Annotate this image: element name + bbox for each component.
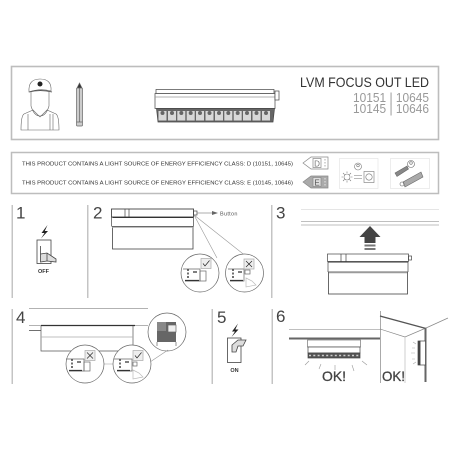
energy label E: [303, 176, 328, 188]
off label: OFF: [38, 269, 50, 275]
icon: switch off: [37, 240, 56, 264]
button label and arrow: Button: [220, 212, 238, 218]
step number 2: 2: [93, 204, 102, 222]
ok label right: OK!: [382, 368, 405, 384]
energy label E: E: [314, 178, 320, 188]
step 5: [212, 308, 246, 384]
luminaire: [308, 340, 360, 358]
step 6: [272, 307, 448, 384]
step 3: [271, 204, 439, 298]
wall rays: [411, 342, 416, 364]
track and luminaire: [29, 308, 148, 351]
icon: switch on: [228, 338, 246, 362]
light rays: [305, 361, 367, 371]
detail circle: wrong: [66, 345, 104, 383]
step 1: [12, 204, 56, 298]
product code line 2: 10145 | 10646: [353, 102, 429, 116]
icon: bolt: [41, 225, 48, 238]
luminaire illustration: [155, 90, 279, 122]
icon: driver replaceable: [390, 158, 430, 188]
luminaire: [328, 254, 412, 294]
step number 4: 4: [16, 308, 25, 327]
step number 5: 5: [217, 308, 226, 327]
luminaire top view: [112, 209, 197, 249]
step number 6: 6: [276, 307, 285, 326]
detail circle: correct: [181, 254, 219, 292]
step 2: [87, 204, 264, 298]
zoom lines: [194, 215, 247, 258]
step 4: [12, 308, 186, 384]
zoom lines: [103, 350, 168, 364]
arrow up: [360, 226, 380, 250]
panel: product header: [12, 66, 438, 140]
detail circle: wrong: [226, 254, 264, 292]
button label and arrow: [197, 211, 238, 218]
icon: bolt: [232, 324, 238, 337]
ceiling track: [289, 328, 380, 330]
wall luminaire: [418, 341, 426, 365]
ceiling lines: [301, 208, 439, 210]
room corner: [380, 311, 448, 383]
panel: energy class: [12, 152, 438, 194]
icon: pencil: [76, 83, 82, 126]
step number 1: 1: [16, 204, 25, 222]
energy text E: THIS PRODUCT CONTAINS A LIGHT SOURCE OF ENERGY EFFICIENCY CLASS: E (10145, 10646): [22, 180, 293, 186]
icon: installer person: [21, 79, 59, 130]
detail circle: cover: [148, 313, 186, 351]
icon: light source replaceable: [340, 158, 378, 188]
energy text D: THIS PRODUCT CONTAINS A LIGHT SOURCE OF ENERGY EFFICIENCY CLASS: D (10151, 10645): [22, 161, 293, 167]
product code line 1: 10151 | 10645: [353, 91, 429, 105]
ok label left: OK!: [322, 368, 346, 384]
detail circle: correct: [113, 345, 151, 383]
step number 3: 3: [276, 204, 285, 222]
energy label D: D: [314, 160, 320, 168]
energy label D: [303, 157, 328, 169]
on label: ON: [230, 368, 239, 374]
title: LVM FOCUS OUT LED: [300, 74, 429, 90]
